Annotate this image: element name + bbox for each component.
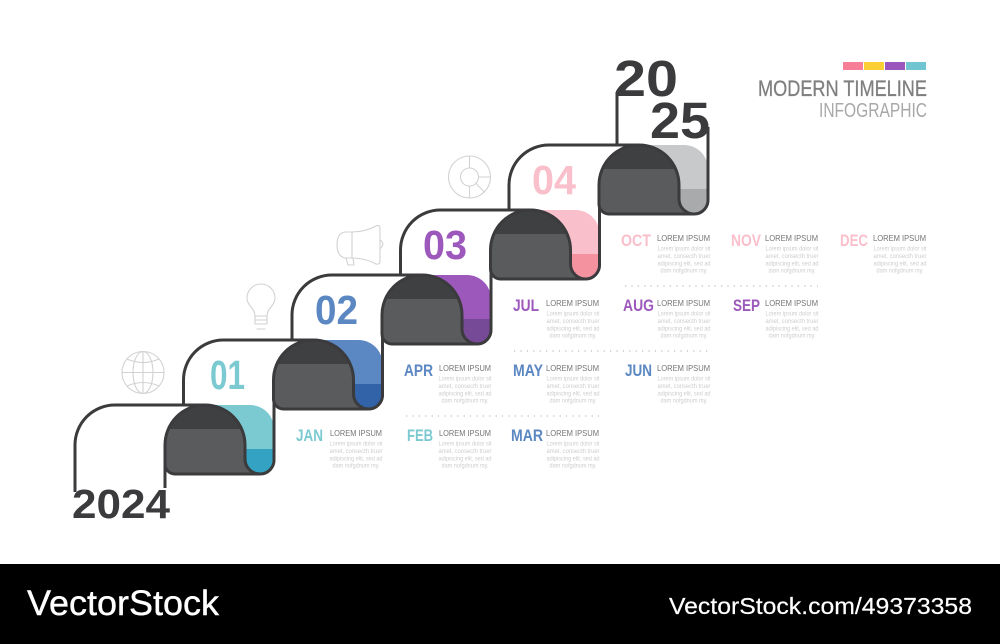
month: AUG xyxy=(623,297,711,340)
month: JAN: amet, consecth truer xyxy=(330,448,382,455)
panel: step 3 purple fold xyxy=(382,257,491,344)
month: MAY: Lorem ipsum dolor sit xyxy=(546,376,600,382)
month: DEC: adipiscing elit, sed ad xyxy=(874,260,927,268)
month: JUN: JUN xyxy=(625,362,652,380)
month: SEP: dam nofgdnum my. xyxy=(768,332,816,340)
panel: step 5 grey fold xyxy=(599,127,708,214)
month: DEC: amet, consecth truer xyxy=(874,253,926,260)
month: AUG: adipiscing elit, sed ad xyxy=(658,326,711,332)
month: APR: APR xyxy=(404,362,433,380)
month: OCT: dam nofgdnum my. xyxy=(660,268,708,274)
month: SEP: LOREM IPSUM xyxy=(765,298,818,308)
month: JUL: adipiscing elit, sed ad xyxy=(546,326,600,332)
month: MAY: adipiscing elit, sed ad xyxy=(546,390,600,398)
icon: globe xyxy=(122,352,164,394)
month: NOV: LOREM IPSUM xyxy=(765,233,818,243)
month: JUL: amet, consecth truer xyxy=(546,318,600,325)
number 04: 04 xyxy=(532,157,576,203)
month: OCT: amet, consecth truer xyxy=(658,253,710,260)
month: DEC: dam nofgdnum my. xyxy=(876,268,924,274)
month: SEP: adipiscing elit, sed ad xyxy=(766,326,819,332)
year 2025 xyxy=(614,50,710,149)
month: FEB: LOREM IPSUM xyxy=(439,428,491,438)
month: FEB: FEB xyxy=(407,427,433,445)
month: DEC: LOREM IPSUM xyxy=(873,233,926,243)
month: APR: LOREM IPSUM xyxy=(439,363,491,373)
month: JUN: LOREM IPSUM xyxy=(657,363,710,373)
month: SEP: amet, consecth truer xyxy=(766,318,818,325)
month: JAN: Lorem ipsum dolor sit xyxy=(330,440,383,448)
month: JAN xyxy=(296,427,383,470)
month: SEP: SEP xyxy=(733,297,760,315)
icon: pie chart xyxy=(448,156,490,198)
month: JUL: dam nofgdnum my. xyxy=(550,332,597,340)
title color bar xyxy=(843,62,926,70)
panel: step 4 pink fold xyxy=(490,192,600,279)
month: MAY xyxy=(513,362,600,404)
month: JUL: JUL xyxy=(513,297,539,315)
panel: step 2 blue fold xyxy=(274,322,383,409)
month: MAY: LOREM IPSUM xyxy=(546,363,599,373)
month: DEC: Lorem ipsum dolor sit xyxy=(874,246,927,252)
month: JAN: adipiscing elit, sed ad xyxy=(330,456,383,462)
month: JAN: LOREM IPSUM xyxy=(330,428,382,438)
month: MAR: LOREM IPSUM xyxy=(546,428,599,438)
month: OCT: Lorem ipsum dolor sit xyxy=(658,246,711,252)
month: DEC: DEC xyxy=(840,232,868,250)
month: MAR: Lorem ipsum dolor sit xyxy=(546,440,600,448)
number 03: 03 xyxy=(423,222,467,268)
month: JUN: adipiscing elit, sed ad xyxy=(658,390,711,398)
year 2024: 2024 xyxy=(72,481,170,527)
number 02: 02 xyxy=(315,287,358,333)
month: FEB: adipiscing elit, sed ad xyxy=(438,456,492,462)
icon: light bulb xyxy=(247,284,275,329)
step frame 1 with 2024 stem xyxy=(75,405,205,492)
panel: step 1 teal fold xyxy=(165,387,274,474)
title: INFOGRAPHIC xyxy=(819,99,927,122)
year 2025: 20 xyxy=(614,50,678,107)
month: SEP: Lorem ipsum dolor sit xyxy=(766,310,819,318)
month: OCT: adipiscing elit, sed ad xyxy=(658,260,711,268)
month: APR xyxy=(404,362,492,404)
month: AUG: dam nofgdnum my. xyxy=(660,332,708,340)
month: SEP xyxy=(733,297,819,340)
month: MAY: dam nofgdnum my. xyxy=(550,398,597,404)
month: FEB: amet, consecth truer xyxy=(438,448,492,455)
month: MAR: dam nofgdnum my. xyxy=(550,462,597,470)
footer bar: VectorStock.com/49373358 xyxy=(669,593,972,619)
month: OCT: OCT xyxy=(621,232,651,250)
month: APR: dam nofgdnum my. xyxy=(442,398,489,404)
month: OCT: LOREM IPSUM xyxy=(657,233,710,243)
month: NOV: adipiscing elit, sed ad xyxy=(766,260,819,268)
month: FEB xyxy=(407,427,492,470)
month: AUG: AUG xyxy=(623,297,654,315)
month: DEC xyxy=(840,232,927,274)
month: FEB: dam nofgdnum my. xyxy=(442,462,489,470)
month: MAY: MAY xyxy=(513,362,543,380)
month: JUN: dam nofgdnum my. xyxy=(660,398,708,404)
month: NOV: Lorem ipsum dolor sit xyxy=(766,246,819,252)
step frame 4 xyxy=(400,210,530,275)
month: NOV: dam nofgdnum my. xyxy=(768,268,816,274)
month: AUG: LOREM IPSUM xyxy=(657,298,710,308)
month: APR: adipiscing elit, sed ad xyxy=(438,390,492,398)
title xyxy=(758,76,927,122)
month: MAR: MAR xyxy=(511,427,543,445)
title: MODERN TIMELINE xyxy=(758,76,927,101)
month: JUN: Lorem ipsum dolor sit xyxy=(658,376,711,382)
month: JUL: Lorem ipsum dolor sit xyxy=(546,310,600,318)
month: MAR: amet, consecth truer xyxy=(546,448,600,455)
month: JUL xyxy=(513,297,600,340)
month: MAY: amet, consecth truer xyxy=(546,383,600,390)
footer bar xyxy=(0,564,1000,644)
month: AUG: Lorem ipsum dolor sit xyxy=(658,310,711,318)
month: APR: Lorem ipsum dolor sit xyxy=(438,376,492,382)
icon: megaphone xyxy=(337,225,383,265)
step frame 3 xyxy=(292,275,422,340)
month: APR: amet, consecth truer xyxy=(438,383,492,390)
month: OCT xyxy=(621,232,711,274)
month: NOV: NOV xyxy=(731,232,761,250)
month: AUG: amet, consecth truer xyxy=(658,318,710,325)
month: JAN: dam nofgdnum my. xyxy=(332,462,380,470)
month: MAR: adipiscing elit, sed ad xyxy=(546,456,600,462)
step frame 5 with 2025 stem xyxy=(509,92,639,210)
number 01: 01 xyxy=(210,352,245,398)
month: NOV xyxy=(731,232,819,274)
step frame 2 xyxy=(184,340,314,405)
month: FEB: Lorem ipsum dolor sit xyxy=(438,440,492,448)
month: MAR xyxy=(511,427,600,470)
footer bar: VectorStock xyxy=(27,584,220,623)
month: JUN: amet, consecth truer xyxy=(658,383,710,390)
month: JUL: LOREM IPSUM xyxy=(546,298,599,308)
year 2025: 25 xyxy=(650,92,710,149)
month: JUN xyxy=(625,362,711,404)
month: JAN: JAN xyxy=(296,427,323,445)
month: NOV: amet, consecth truer xyxy=(766,253,818,260)
